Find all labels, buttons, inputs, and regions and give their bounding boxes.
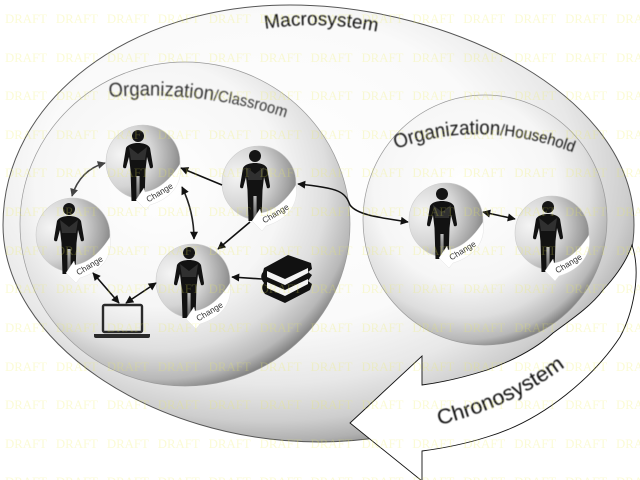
arrow: top person to bottom person: [182, 187, 194, 239]
arrow: bottom person to laptop: [126, 283, 156, 303]
arrow: classroom to household link: [298, 184, 408, 222]
watermark: DRAFT grid: DRAFT DRAFT DRAFT DRAFT DRAFT DRAFT DRAFT DRAFT DRAFT DRAFT DRAFT DRAFT DRAFT: [5, 89, 640, 103]
person sphere: right classroom: Change: [260, 201, 291, 225]
arrow: between household persons: [483, 212, 515, 219]
person sphere: household left: [409, 183, 484, 268]
person sphere: household right: Change: [553, 251, 584, 275]
person sphere: household left: Change: [447, 238, 478, 262]
arrow: left person to laptop: [93, 273, 119, 303]
person sphere: top classroom: Change: [144, 180, 175, 204]
label: Chronosystem: Chronosystem: [437, 358, 565, 424]
watermark: DRAFT grid: DRAFT DRAFT DRAFT DRAFT DRAFT DRAFT DRAFT DRAFT DRAFT DRAFT DRAFT DRAFT DRAFT: [5, 51, 640, 65]
heading: Macrosystem: Macrosystem: [264, 13, 378, 32]
person sphere: bottom classroom: Change: [194, 299, 225, 323]
watermark: DRAFT grid: DRAFT DRAFT DRAFT DRAFT DRAFT DRAFT DRAFT DRAFT DRAFT DRAFT DRAFT DRAFT DRAFT: [5, 437, 640, 451]
watermark: DRAFT grid: DRAFT DRAFT DRAFT DRAFT DRAFT DRAFT DRAFT DRAFT DRAFT DRAFT DRAFT DRAFT DRAFT: [5, 360, 640, 374]
watermark: DRAFT grid: DRAFT DRAFT DRAFT DRAFT DRAFT DRAFT DRAFT DRAFT DRAFT DRAFT DRAFT DRAFT DRAFT: [5, 398, 640, 412]
arrow: right person to top person: [181, 168, 222, 185]
arrow: right person to bottom person: [218, 222, 250, 249]
person sphere: left classroom: [36, 198, 111, 283]
watermark: DRAFT grid: DRAFT DRAFT DRAFT DRAFT DRAFT DRAFT DRAFT DRAFT DRAFT DRAFT DRAFT DRAFT DRAFT: [5, 282, 640, 296]
watermark: DRAFT grid: DRAFT DRAFT DRAFT DRAFT DRAFT DRAFT DRAFT DRAFT DRAFT DRAFT DRAFT DRAFT DRAFT: [5, 321, 640, 335]
watermark: DRAFT grid: DRAFT DRAFT DRAFT DRAFT DRAFT DRAFT DRAFT DRAFT DRAFT DRAFT DRAFT DRAFT DRAFT: [5, 12, 640, 26]
watermark: DRAFT grid: DRAFT DRAFT DRAFT DRAFT DRAFT DRAFT DRAFT DRAFT DRAFT DRAFT DRAFT DRAFT DRAFT: [5, 205, 640, 219]
watermark: DRAFT grid: DRAFT DRAFT DRAFT DRAFT DRAFT DRAFT DRAFT DRAFT DRAFT DRAFT DRAFT DRAFT DRAFT: [5, 166, 640, 180]
watermark: DRAFT grid: DRAFT DRAFT DRAFT DRAFT DRAFT DRAFT DRAFT DRAFT DRAFT DRAFT DRAFT DRAFT DRAFT: [5, 128, 640, 142]
icon: stack of books: [261, 255, 312, 303]
heading: Organization/Classroom: Organization/Classroom: [108, 80, 288, 118]
heading: Organization/Household: Organization/Household: [393, 119, 576, 152]
person sphere: bottom classroom: [156, 244, 231, 329]
person sphere: right classroom: [222, 146, 297, 231]
watermark: DRAFT grid: DRAFT DRAFT DRAFT DRAFT DRAFT DRAFT DRAFT DRAFT DRAFT DRAFT DRAFT DRAFT DRAFT: [5, 244, 640, 258]
arrow: top person to left person: [72, 163, 105, 196]
person sphere: household right: [515, 196, 590, 281]
panel: organization classroom ellipse: [20, 62, 350, 386]
panel: organization household ellipse: [363, 95, 607, 345]
person sphere: left classroom: Change: [74, 253, 105, 277]
arrow: books to person: [232, 277, 262, 279]
arrow: Chronosystem curved block arrow: [349, 244, 637, 480]
person sphere: top classroom: [106, 125, 181, 210]
icon: laptop: [94, 305, 150, 338]
